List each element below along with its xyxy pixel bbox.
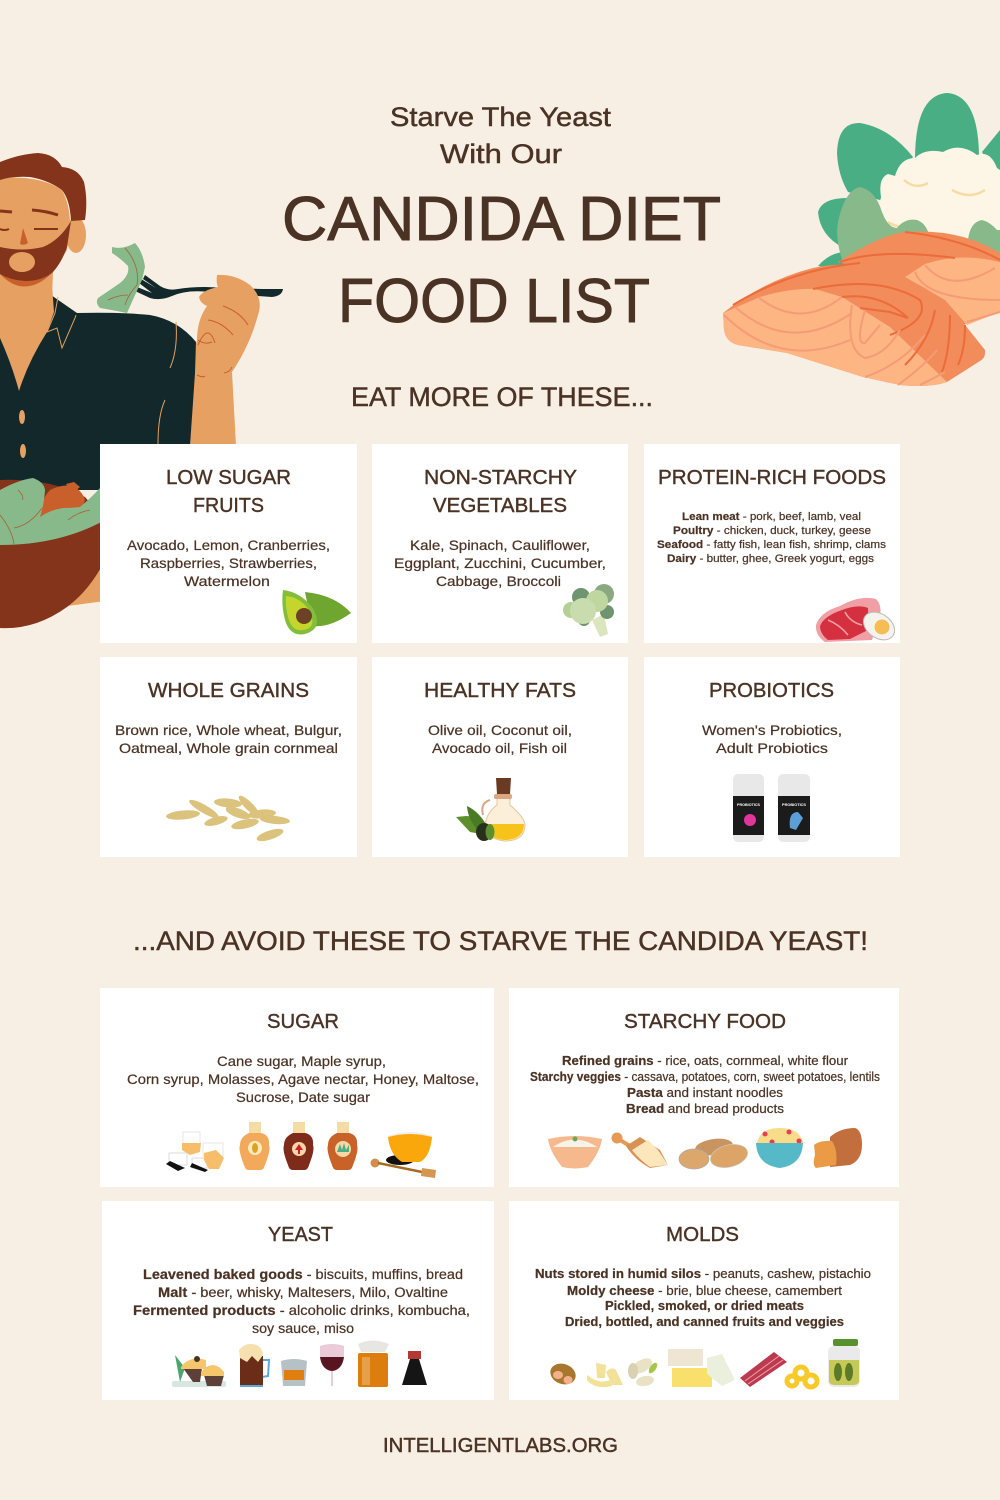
food list: Watermelon (184, 573, 270, 589)
heading: eat more: EAT MORE OF THESE... (351, 382, 653, 412)
food list: soy sauce, miso (252, 1321, 354, 1336)
food list (702, 722, 842, 756)
icon: pineapple rings (787, 1367, 817, 1387)
icon: wine glass (320, 1344, 344, 1386)
fork (135, 275, 283, 299)
icon: grains (166, 793, 290, 844)
icon: corn syrup bottle (240, 1122, 270, 1170)
panel: starchy food (509, 988, 899, 1187)
heading: VEGETABLES (433, 495, 567, 517)
food list: Pasta and instant noodles (627, 1086, 783, 1100)
main heading: FOOD LIST (338, 267, 650, 336)
heading: PROTEIN-RICH FOODS (658, 467, 886, 489)
food list (127, 537, 330, 589)
icon: flour scoop (612, 1132, 668, 1168)
food list: Raspberries, Strawberries, (140, 555, 317, 571)
food list: Dried, bottled, and canned fruits and veggies (565, 1315, 844, 1329)
panel: whole grains (100, 657, 357, 857)
food list: Women's Probiotics, (702, 722, 842, 738)
heading (166, 467, 291, 517)
cauliflower head (880, 148, 1000, 240)
panel: non-starchy vegetables (372, 444, 628, 643)
food list (127, 1053, 479, 1105)
heading: avoid: ...AND AVOID THESE TO STARVE THE CANDIDA YEAST! (133, 926, 868, 956)
panel: healthy fats (372, 657, 628, 857)
icon: maple syrup bottle (284, 1122, 314, 1170)
icon: pistachios (628, 1355, 659, 1387)
food list: Cabbage, Broccoli (436, 573, 561, 589)
food list (428, 722, 572, 756)
heading: STARCHY FOOD (624, 1011, 786, 1033)
icon: cashews (587, 1363, 623, 1387)
food list: Poultry - chicken, duck, turkey, geese (673, 525, 871, 537)
icon: pasta bowl (756, 1128, 803, 1168)
back salmon fillet (838, 231, 1000, 326)
food list (535, 1267, 871, 1329)
food list: Seafood - fatty fish, lean fish, shrimp, clams (657, 539, 887, 551)
icons: sugar row (166, 1122, 436, 1178)
food list: Kale, Spinach, Cauliflower, (410, 537, 590, 553)
icon: bacon (740, 1352, 787, 1387)
heading: YEAST (268, 1224, 333, 1246)
subtitle (390, 102, 612, 169)
main heading (282, 185, 721, 336)
food list: Nuts stored in humid silos - peanuts, cashew, pistachio (535, 1267, 871, 1281)
food list: Malt - beer, whisky, Maltesers, Milo, Ovaltine (158, 1285, 448, 1300)
icon: rice bowl (548, 1136, 602, 1168)
icon: pickle jar (828, 1339, 860, 1387)
food list: Leavened baked goods - biscuits, muffins, bread (143, 1267, 463, 1282)
icon: muffins (172, 1355, 226, 1387)
panel: sugar (100, 988, 494, 1187)
heading: HEALTHY FATS (424, 680, 576, 702)
food list: Corn syrup, Molasses, Agave nectar, Honey, Maltose, (127, 1071, 479, 1087)
panel: probiotics (644, 657, 900, 857)
icon: meat and egg (816, 598, 900, 646)
food list: Dairy - butter, ghee, Greek yogurt, eggs (667, 553, 875, 565)
icon: soy sauce (402, 1351, 427, 1385)
shirt (0, 295, 196, 490)
food list (133, 1267, 470, 1336)
food list (530, 1054, 880, 1116)
food list: Adult Probiotics (716, 740, 828, 756)
icon: probiotic bottles: PROBIOTICS (782, 803, 807, 807)
food list: Refined grains - rice, oats, cornmeal, white flour (562, 1054, 848, 1068)
food list: Cane sugar, Maple syrup, (217, 1053, 386, 1069)
food list (657, 511, 887, 565)
icons: molds row (547, 1339, 860, 1388)
icon: agave syrup bottle (328, 1122, 358, 1170)
food list (394, 537, 606, 589)
panel: low sugar fruits (100, 444, 357, 643)
subtitle: With Our (440, 139, 562, 169)
food list: Starchy veggies - cassava, potatoes, corn, sweet potatoes, lentils (530, 1070, 880, 1084)
light leaves (837, 187, 930, 270)
food list (115, 722, 342, 756)
icon: kombucha jar (358, 1340, 389, 1387)
food list: Moldy cheese - brie, blue cheese, camembert (567, 1284, 843, 1298)
front salmon fillet (723, 265, 985, 386)
food list: Eggplant, Zucchini, Cucumber, (394, 555, 606, 571)
lettuce on fork (97, 243, 145, 313)
heading (424, 467, 577, 517)
heading: NON-STARCHY (424, 467, 577, 489)
icon: avocado (282, 590, 351, 634)
food list: Lean meat - pork, beef, lamb, veal (682, 511, 861, 523)
icons: yeast row (172, 1340, 427, 1387)
icon: peanut (547, 1360, 579, 1388)
heading: FRUITS (193, 495, 264, 517)
icon: probiotic bottles (733, 774, 810, 842)
title (282, 102, 721, 336)
panel: molds (509, 1201, 899, 1400)
illustration: man eating salad (0, 153, 283, 628)
icon: cheeses (668, 1349, 735, 1387)
footer: website: INTELLIGENTLABS.ORG (383, 1435, 618, 1457)
icon: sugar cubes (166, 1132, 224, 1172)
icon: bread loaf (814, 1128, 862, 1168)
food list: Brown rice, Whole wheat, Bulgur, (115, 722, 342, 738)
icon: honey bowl (370, 1132, 436, 1178)
icon: potatoes (679, 1136, 750, 1171)
panel: protein-rich foods (644, 444, 900, 646)
heading: LOW SUGAR (166, 467, 291, 489)
heading: MOLDS (666, 1224, 739, 1246)
man's forearm and hand (190, 275, 260, 446)
heading: WHOLE GRAINS (148, 680, 309, 702)
head (0, 153, 86, 300)
food list: Pickled, smoked, or dried meats (605, 1299, 804, 1313)
food list: Bread and bread products (626, 1102, 784, 1116)
illustration: salmon and cauliflower (723, 93, 1000, 386)
cauliflower leaves (915, 93, 979, 160)
food list: Fermented products - alcoholic drinks, kombucha, (133, 1303, 470, 1318)
icon: whisky glass (281, 1359, 307, 1386)
icon: probiotic bottles: PROBIOTICS (737, 803, 761, 807)
food list: Sucrose, Date sugar (236, 1089, 370, 1105)
food list: Avocado, Lemon, Cranberries, (127, 537, 330, 553)
food list: Olive oil, Coconut oil, (428, 722, 572, 738)
icon: broccoli (563, 584, 614, 637)
icon: oil bottle (456, 778, 525, 841)
icon: beer mug (239, 1344, 269, 1387)
heading: PROBIOTICS (709, 680, 834, 702)
salad bowl (0, 478, 105, 628)
food list: Oatmeal, Whole grain cornmeal (119, 740, 338, 756)
food list: Avocado oil, Fish oil (432, 740, 567, 756)
icons: starchy row (548, 1128, 862, 1171)
subtitle: Starve The Yeast (390, 102, 612, 132)
heading: SUGAR (267, 1011, 339, 1033)
panel: yeast (102, 1201, 494, 1400)
main heading: CANDIDA DIET (282, 185, 721, 254)
